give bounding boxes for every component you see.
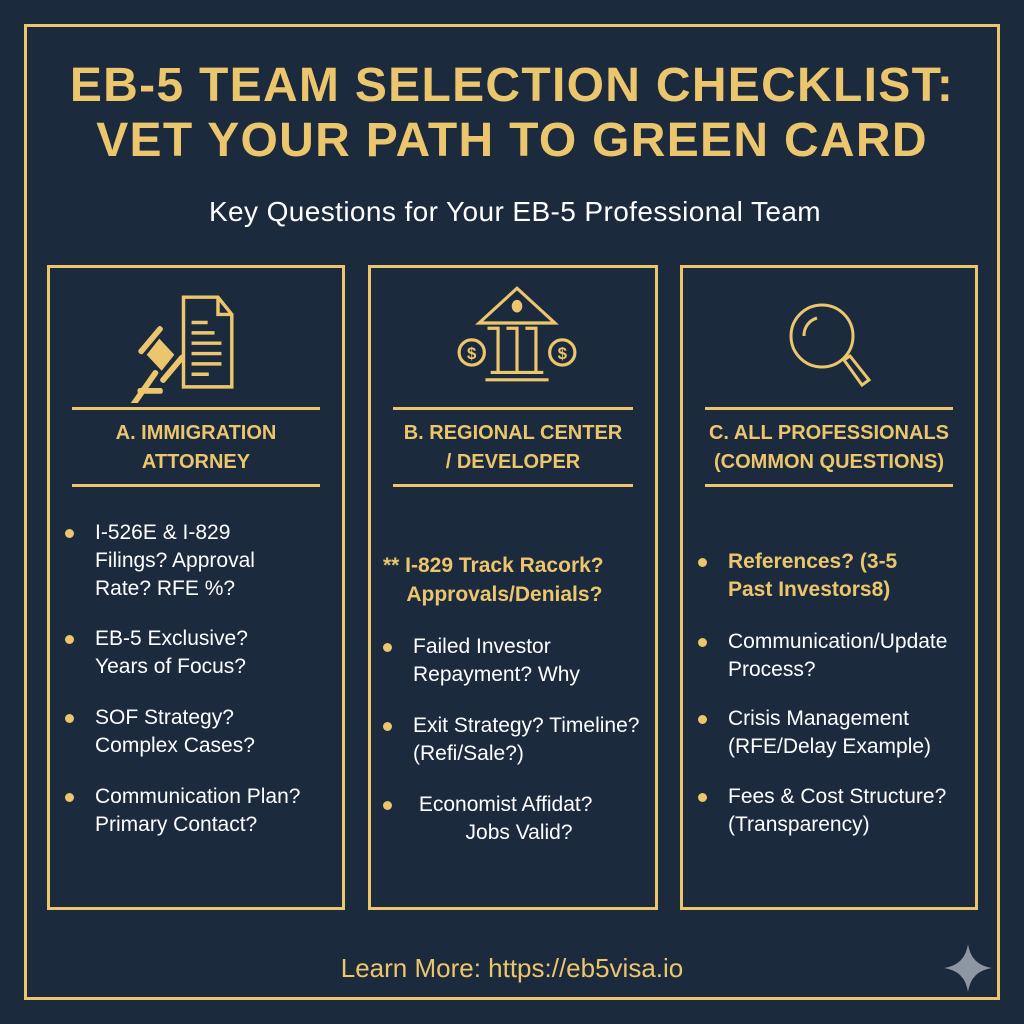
panel: regional center bbox=[368, 265, 658, 910]
bullets: ** I-829 Track Racork? bbox=[383, 554, 604, 577]
panel: immigration attorney: EB-5 Exclusive? bbox=[95, 627, 248, 650]
icon: bank with coins: $ bbox=[558, 344, 568, 363]
panel: immigration attorney: Primary Contact? bbox=[95, 813, 257, 836]
panel: regional center: Economist Affidat? bbox=[419, 793, 592, 816]
panel: all professionals: (RFE/Delay Example) bbox=[728, 735, 931, 758]
bullets bbox=[95, 519, 255, 603]
bullets: Rate? RFE %? bbox=[95, 577, 235, 600]
panel: regional center: (Refi/Sale?) bbox=[413, 742, 524, 765]
bullets: Filings? Approval bbox=[95, 549, 255, 572]
header: ATTORNEY bbox=[142, 451, 250, 473]
panel: immigration attorney bbox=[47, 265, 345, 910]
icon: bank with coins bbox=[458, 286, 576, 382]
bullets: I-526E & I-829 bbox=[95, 521, 230, 544]
bullets: Past Investors8) bbox=[728, 578, 890, 601]
header: / DEVELOPER bbox=[446, 451, 580, 473]
panel: all professionals: Communication/Update bbox=[728, 630, 947, 653]
panel: regional center: Exit Strategy? Timeline? bbox=[413, 714, 639, 737]
panel: immigration attorney: Communication Plan? bbox=[95, 785, 300, 808]
header: (COMMON QUESTIONS) bbox=[714, 451, 944, 473]
panel: regional center: Failed Investor bbox=[413, 635, 551, 658]
title: EB-5 TEAM SELECTION CHECKLIST: bbox=[70, 59, 954, 112]
title: VET YOUR PATH TO GREEN CARD bbox=[96, 114, 928, 167]
bullets: Approvals/Denials? bbox=[406, 583, 602, 606]
header: C. ALL PROFESSIONALS bbox=[709, 422, 949, 444]
icon: magnifier bbox=[790, 304, 872, 388]
bullets: References? (3-5 bbox=[728, 550, 897, 573]
panel: all professionals: Fees & Cost Structure? bbox=[728, 785, 946, 808]
panel: all professionals: (Transparency) bbox=[728, 813, 870, 836]
header bbox=[393, 407, 633, 487]
panel: immigration attorney: SOF Strategy? bbox=[95, 706, 234, 729]
panel: immigration attorney: Years of Focus? bbox=[95, 655, 246, 678]
panel: all professionals: Process? bbox=[728, 658, 816, 681]
panel: immigration attorney: Complex Cases? bbox=[95, 734, 255, 757]
bullets bbox=[383, 554, 604, 606]
header: B. REGIONAL CENTER bbox=[404, 422, 622, 444]
header: A. IMMIGRATION bbox=[116, 422, 276, 444]
footer link: Learn More: https://eb5visa.io bbox=[341, 953, 683, 983]
bullets bbox=[728, 548, 897, 604]
panel: all professionals bbox=[680, 265, 978, 910]
panel: regional center: Jobs Valid? bbox=[466, 821, 573, 844]
icon: sparkle bbox=[944, 944, 992, 992]
title bbox=[70, 59, 954, 167]
icon: gavel and document bbox=[130, 296, 234, 403]
panel: regional center: Repayment? Why bbox=[413, 663, 580, 686]
subtitle: Key Questions for Your EB-5 Professional Team bbox=[209, 196, 821, 227]
panel: all professionals: Crisis Management bbox=[728, 707, 909, 730]
header bbox=[705, 407, 953, 487]
header bbox=[72, 407, 320, 487]
icon: bank with coins: $ bbox=[467, 344, 477, 363]
